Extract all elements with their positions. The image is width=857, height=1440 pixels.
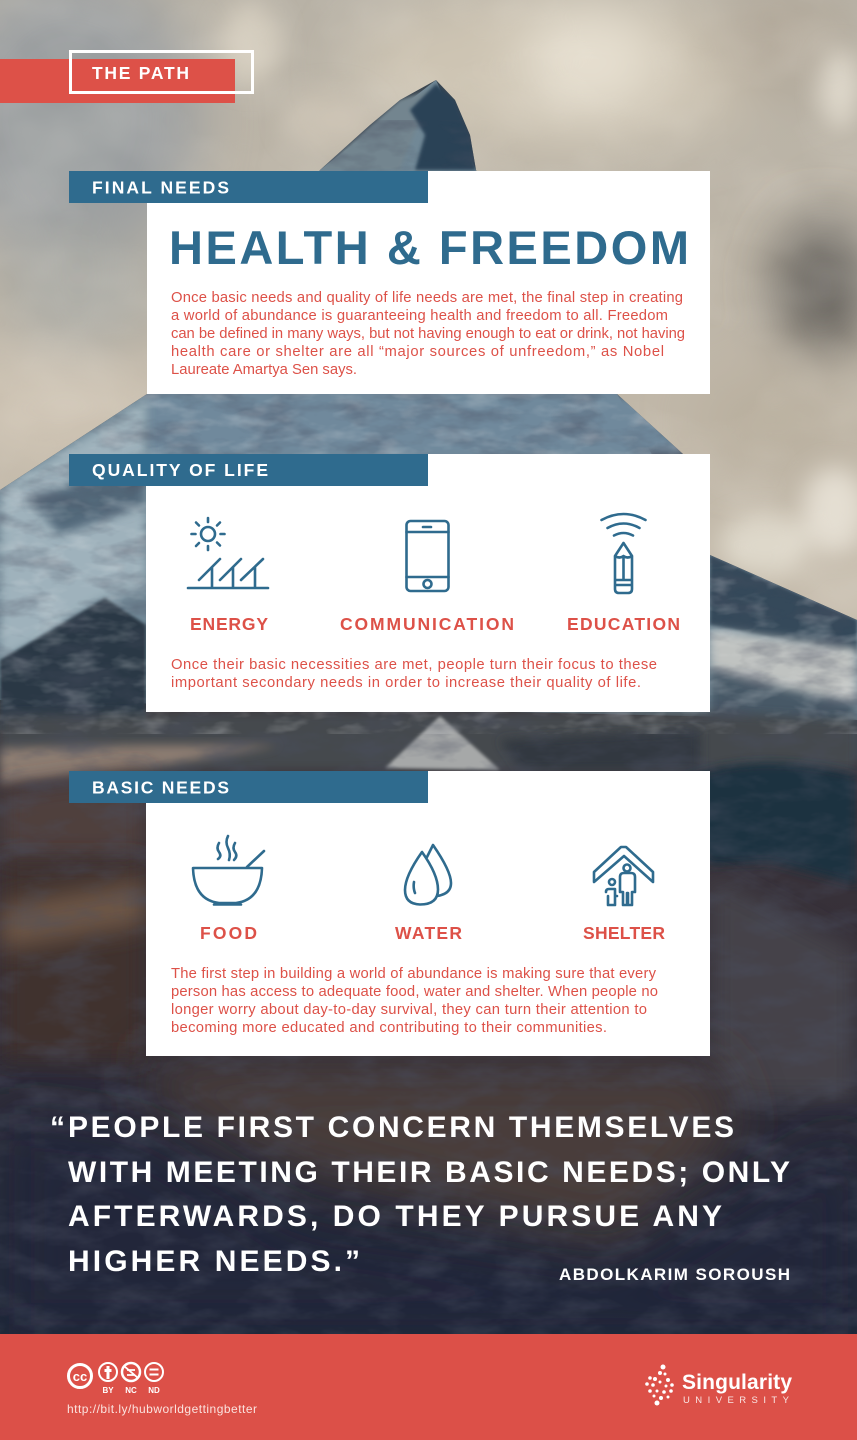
tag: the path <box>0 52 252 103</box>
text: final needs body: health care or shelter are all “major sources of unfreedom,” as Nobel <box>171 344 664 360</box>
dark ridge <box>0 598 146 730</box>
text: basic needs body: becoming more educated and contributing to their communities. <box>171 1020 607 1036</box>
icon: creative commons licence: ND <box>148 1386 160 1395</box>
upper mountain, snow <box>0 80 857 720</box>
icon: food bowl <box>193 836 264 904</box>
panel: final needs <box>69 171 710 394</box>
quote: WITH MEETING THEIR BASIC NEEDS; ONLY <box>68 1156 790 1189</box>
section bar: basic needs: BASIC NEEDS <box>92 778 229 798</box>
quote attribution: ABDOLKARIM SOROUSH <box>559 1265 790 1284</box>
icon: wifi pencil <box>602 514 646 593</box>
quote <box>50 1111 790 1278</box>
logo: singularity university <box>645 1364 792 1406</box>
quote: AFTERWARDS, DO THEY PURSUE ANY <box>68 1200 722 1233</box>
logo: singularity university: UNIVERSITY <box>683 1395 790 1406</box>
valley band <box>0 712 857 770</box>
icon: smartphone <box>406 521 448 591</box>
text: final needs body: Laureate Amartya Sen says. <box>171 362 357 378</box>
text: basic needs body: person has access to adequate food, water and shelter. When people no <box>171 984 658 1000</box>
section bar: final needs: FINAL NEEDS <box>92 178 229 198</box>
label: food: FOOD <box>200 923 257 943</box>
quote: “ <box>50 1111 65 1144</box>
text: quality of life body <box>171 657 657 691</box>
panel: quality of life <box>69 454 710 712</box>
icon: creative commons licence: cc <box>73 1369 87 1384</box>
label: water: WATER <box>395 923 462 943</box>
icon: solar energy <box>188 518 268 588</box>
text: basic needs body: The first step in building a world of abundance is making sure that every <box>171 966 657 982</box>
text: quality of life body: Once their basic necessities are met, people turn their focus to these <box>171 657 657 673</box>
icon: creative commons licence <box>68 1363 163 1395</box>
label: education: EDUCATION <box>567 614 680 634</box>
icon: water drops <box>405 845 451 904</box>
panel: basic needs <box>69 771 710 1056</box>
label: energy: ENERGY <box>190 614 268 634</box>
text: quality of life body: important secondary needs in order to increase their quality of life. <box>171 675 641 691</box>
icon: shelter and family <box>594 847 653 905</box>
text: final needs body: a world of abundance is guaranteeing health and freedom to all. Freedom <box>171 308 668 324</box>
icon: creative commons licence: BY <box>102 1386 114 1395</box>
quote: PEOPLE FIRST CONCERN THEMSELVES <box>68 1111 734 1144</box>
logo: singularity university: Singularity <box>682 1371 792 1394</box>
footer band <box>0 1334 857 1440</box>
text: final needs body <box>171 290 685 378</box>
text: basic needs body: longer worry about day-to-day survival, they can turn their attention to <box>171 1002 647 1018</box>
link: http://bit.ly/hubworldgettingbetter <box>67 1402 257 1416</box>
section bar: quality of life: QUALITY OF LIFE <box>92 460 268 480</box>
tag: the path: THE PATH <box>92 63 189 83</box>
section bar: quality of life <box>69 454 428 486</box>
label: shelter: SHELTER <box>583 923 665 943</box>
icon: creative commons licence: NC <box>125 1386 137 1395</box>
text: final needs body: can be defined in many ways, but not having enough to eat or drink, not having <box>171 326 685 342</box>
section bar: basic needs <box>69 771 428 803</box>
quote: HIGHER NEEDS.” <box>68 1245 360 1278</box>
text: final needs body: Once basic needs and quality of life needs are met, the final step in creating <box>171 290 683 306</box>
text: basic needs body <box>171 966 658 1036</box>
section bar: final needs <box>69 171 428 203</box>
heading: health and freedom: HEALTH & FREEDOM <box>169 221 689 274</box>
label: communication: COMMUNICATION <box>340 614 514 634</box>
